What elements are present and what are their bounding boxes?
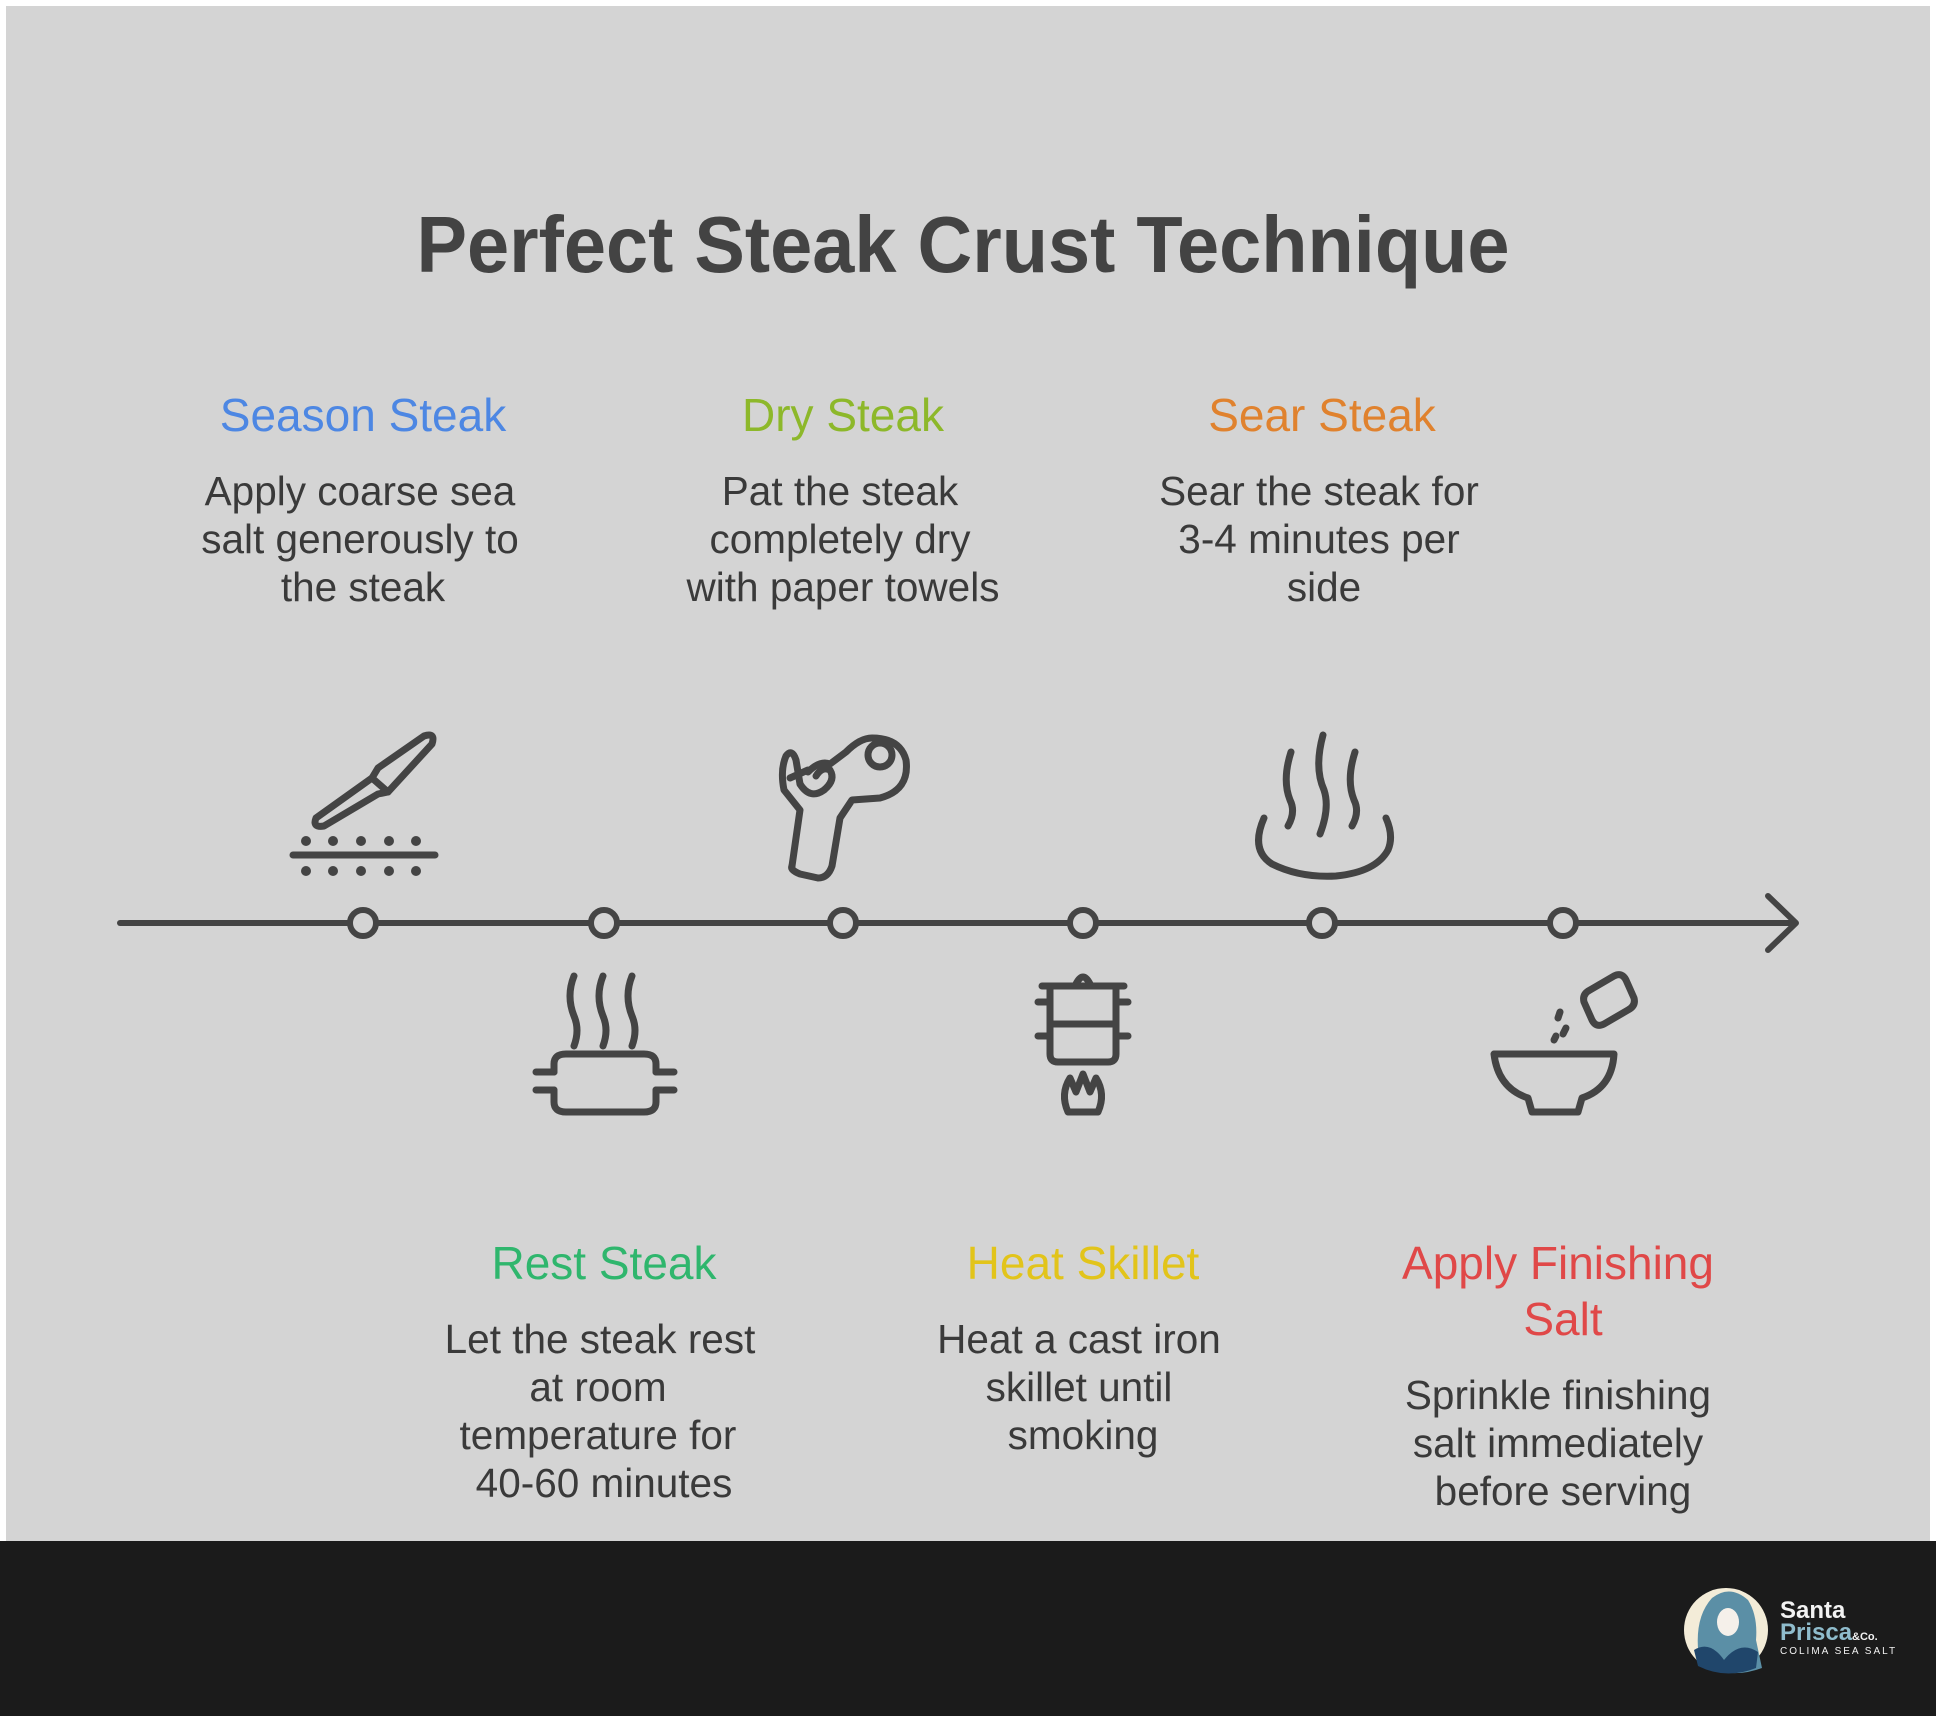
step: season steak: the steak: [281, 564, 446, 610]
step: heat skillet: Heat Skillet: [967, 1237, 1200, 1289]
step: dry steak: Pat the steak: [722, 468, 959, 514]
step: sear steak: Sear the steak for: [1159, 468, 1479, 514]
step: apply finishing salt: Sprinkle finishing: [1405, 1372, 1711, 1418]
step: rest steak: temperature for: [460, 1412, 736, 1458]
logo: Santa Prisca & Co.: &Co.: [1852, 1631, 1878, 1643]
step: dry steak: completely dry: [709, 516, 971, 562]
step: season steak: [201, 389, 519, 610]
step: heat skillet: smoking: [1008, 1412, 1158, 1458]
step: rest steak: 40-60 minutes: [476, 1460, 732, 1506]
step: rest steak: at room: [529, 1364, 667, 1410]
icon: pot on flame: [1038, 977, 1128, 1112]
step: heat skillet: Heat a cast iron: [937, 1316, 1221, 1362]
step: season steak: salt generously to: [201, 516, 519, 562]
footer bar: [0, 1541, 1936, 1716]
step: sear steak: side: [1287, 564, 1361, 610]
step: dry steak: with paper towels: [686, 564, 999, 610]
step: rest steak: Let the steak rest: [445, 1316, 755, 1362]
step: rest steak: Rest Steak: [492, 1237, 717, 1289]
step: apply finishing salt: Apply Finishing: [1402, 1237, 1714, 1289]
icon: logo emblem: [1684, 1588, 1768, 1674]
step: heat skillet: [937, 1237, 1221, 1458]
icon: hand with towel: [782, 738, 906, 878]
logo: Santa Prisca & Co.: Santa: [1780, 1597, 1846, 1624]
step: sear steak: Sear Steak: [1208, 389, 1437, 441]
step: heat skillet: skillet until: [986, 1364, 1172, 1410]
step: sear steak: [1159, 389, 1479, 610]
timeline arrow: [120, 896, 1796, 950]
step: apply finishing salt: salt immediately: [1413, 1420, 1704, 1466]
step: dry steak: [686, 389, 999, 610]
step: rest steak: [445, 1237, 755, 1506]
title: Perfect Steak Crust Technique: [416, 200, 1510, 289]
step: season steak: Season Steak: [220, 389, 507, 441]
icon: salt shaker over bowl: [1494, 975, 1634, 1112]
step: season steak: Apply coarse sea: [205, 468, 516, 514]
step: apply finishing salt: [1402, 1237, 1714, 1514]
logo: Santa Prisca & Co.: Prisca: [1780, 1619, 1853, 1646]
icon: resting steam tray: [536, 976, 674, 1112]
step: apply finishing salt: Salt: [1523, 1293, 1603, 1345]
step: sear steak: 3-4 minutes per: [1178, 516, 1460, 562]
step: apply finishing salt: before serving: [1435, 1468, 1691, 1514]
logo: Santa Prisca & Co.: [1684, 1588, 1897, 1674]
icon: sizzling steam: [1259, 735, 1391, 876]
step: dry steak: Dry Steak: [742, 389, 945, 441]
logo: Santa Prisca & Co.: COLIMA SEA SALT: [1780, 1646, 1897, 1657]
icon: knife and salt: [293, 735, 435, 876]
